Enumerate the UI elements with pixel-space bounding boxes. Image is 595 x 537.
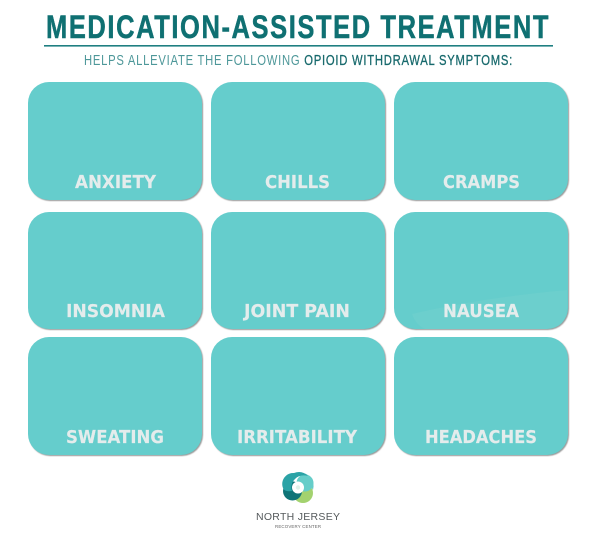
icon: north jersey logo bbox=[282, 472, 314, 503]
panel: insomnia: INSOMNIA bbox=[66, 301, 165, 322]
subtitle: HELPS ALLEVIATE THE FOLLOWING OPIOID WITHDRAWAL SYMPTOMS: bbox=[84, 52, 513, 69]
panel: irritability: IRRITABILITY bbox=[237, 427, 358, 448]
panel: sweating bbox=[28, 337, 203, 456]
panel: insomnia bbox=[28, 212, 203, 330]
panel: nausea bbox=[394, 212, 569, 330]
panel: joint pain bbox=[211, 212, 386, 330]
panel: headaches bbox=[394, 337, 569, 456]
panel: anxiety: ANXIETY bbox=[75, 172, 157, 193]
panel: irritability bbox=[211, 337, 386, 456]
panel: nausea: NAUSEA bbox=[443, 301, 519, 322]
panel: headaches: HEADACHES bbox=[425, 427, 537, 448]
panel: chills bbox=[211, 82, 386, 201]
panel: anxiety bbox=[28, 82, 203, 201]
panel: sweating: SWEATING bbox=[66, 427, 164, 448]
panel: cramps: CRAMPS bbox=[443, 172, 520, 193]
title underline bbox=[44, 45, 553, 47]
panel: cramps bbox=[394, 82, 569, 201]
panel: joint pain: JOINT PAIN bbox=[242, 301, 350, 322]
logo wordmark: NORTH JERSEY bbox=[256, 511, 340, 523]
logo tagline: RECOVERY CENTER bbox=[275, 524, 321, 529]
panel: chills: CHILLS bbox=[265, 172, 330, 193]
